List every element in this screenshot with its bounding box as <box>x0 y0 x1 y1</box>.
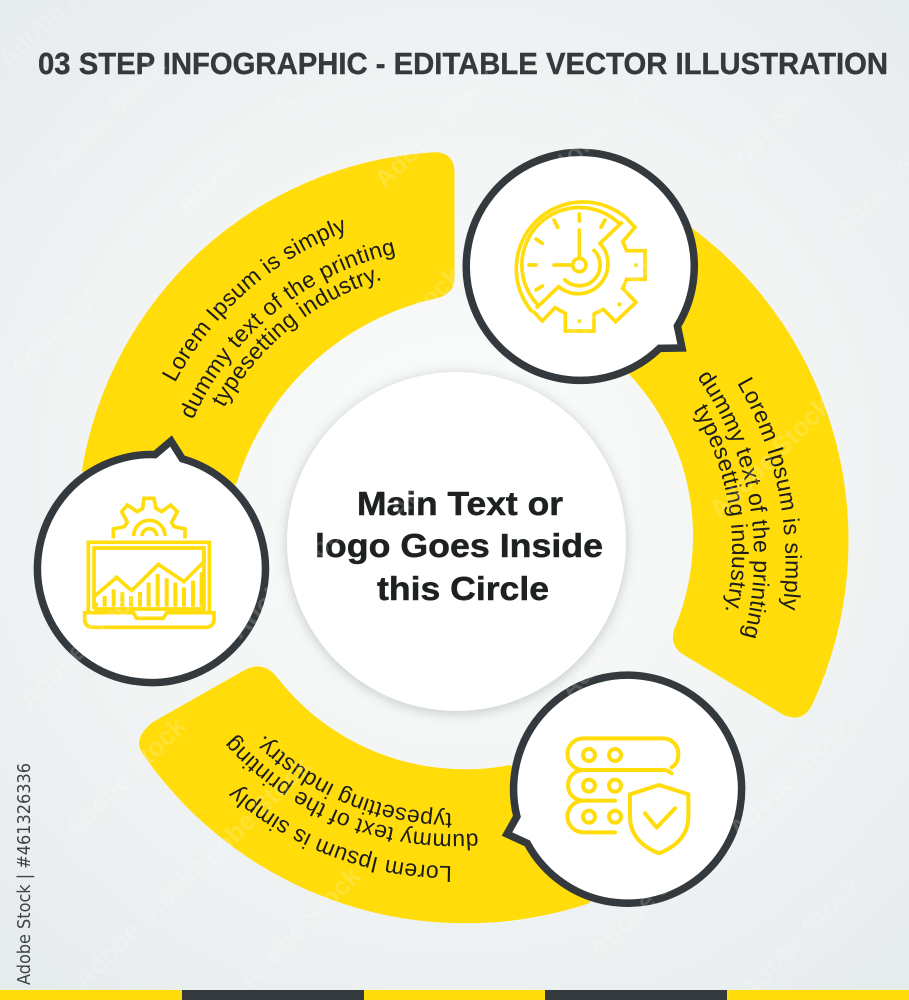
panel: right yellow band: Lorem Ipsum is simply <box>738 376 802 611</box>
panel: bottom yellow band: typesetting industry. <box>259 736 452 828</box>
watermark: Adobe Stock <box>703 60 837 194</box>
watermark: Adobe Stock <box>183 750 317 884</box>
center circle <box>287 372 626 711</box>
bottom colour bar <box>0 990 909 1000</box>
watermark: Adobe Stock <box>543 230 677 364</box>
watermark: Adobe Stock <box>583 830 717 964</box>
center circle: this Circle <box>377 570 549 607</box>
panel: right yellow band: dummy text of the printing <box>699 372 770 638</box>
panel: bottom yellow band: Lorem Ipsum is simply <box>228 787 450 882</box>
watermark: Adobe Stock <box>13 580 147 714</box>
center circle: Main Text or <box>357 485 563 522</box>
stock id label: Adobe Stock | #461326336 <box>15 763 35 985</box>
watermark: Adobe Stock <box>233 860 367 994</box>
panel: right yellow band: typesetting industry. <box>692 404 749 610</box>
speech bubble: bottom <box>507 675 742 903</box>
panel: top-left yellow band <box>82 152 454 486</box>
panel: top-left yellow band: typesetting industry. <box>212 270 380 406</box>
watermark: Adobe Stock <box>68 860 202 994</box>
watermark: Adobe Stock <box>368 60 502 194</box>
watermark: Adobe Stock <box>383 390 517 524</box>
panel: right yellow band <box>628 228 848 718</box>
center circle: logo Goes Inside <box>315 527 603 564</box>
panel: bottom yellow band: dummy text of the printing <box>226 735 478 850</box>
icon: clock and gear <box>516 202 645 331</box>
panel: top-left yellow band: dummy text of the printing <box>182 242 395 418</box>
watermark: Adobe Stock <box>168 85 302 219</box>
watermark: Adobe Stock <box>3 250 137 384</box>
watermark: Adobe Stock <box>38 50 172 184</box>
watermark: Adobe Stock <box>723 710 857 844</box>
watermark: Adobe Stock <box>223 510 357 644</box>
watermark: Adobe Stock <box>553 570 687 704</box>
speech bubble: left <box>37 441 265 683</box>
speech bubble: top right <box>466 152 694 380</box>
panel: bottom yellow band <box>139 666 590 924</box>
watermark: Adobe Stock <box>58 710 192 844</box>
watermark: Adobe Stock <box>533 60 667 194</box>
icon: server and shield <box>567 738 688 853</box>
panel: top-left yellow band: Lorem Ipsum is simply <box>162 220 344 382</box>
watermark: Adobe Stock <box>333 260 467 394</box>
watermark: Adobe Stock <box>348 590 482 724</box>
watermark: Adobe Stock <box>703 390 837 524</box>
icon: laptop with chart and gear <box>85 498 214 627</box>
